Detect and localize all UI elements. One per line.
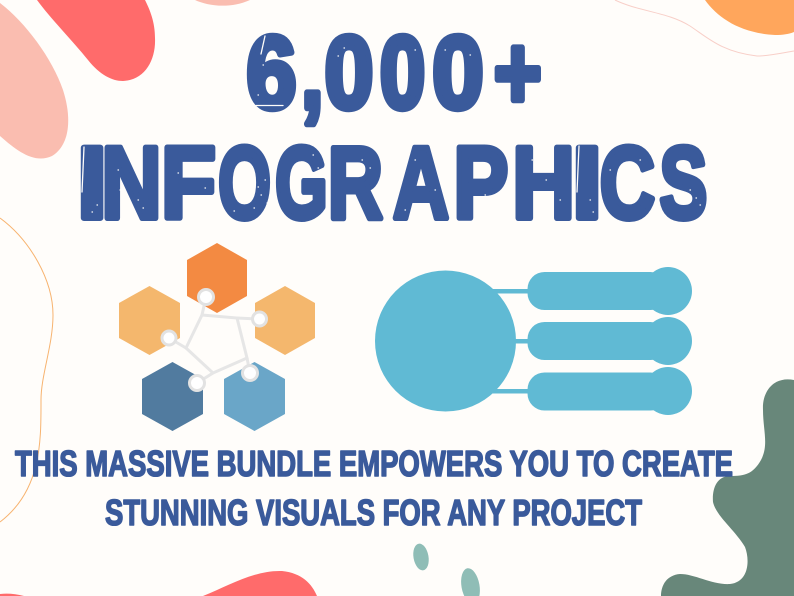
title: INFOGRAPHICS: P <box>454 126 508 240</box>
title: INFOGRAPHICS: N <box>101 126 162 240</box>
title: 6,000+: , <box>301 15 324 130</box>
chart: hexagon cycle <box>119 243 315 431</box>
curve: pink line top right <box>615 0 794 56</box>
subtitle line two: STUNNING VISUALS FOR ANY PROJECT <box>105 492 642 533</box>
hexagon: orange top <box>187 243 247 313</box>
bar three <box>528 367 692 415</box>
blob: small pink top <box>195 0 250 6</box>
title: 6,000+: 0 <box>432 15 484 130</box>
title: INFOGRAPHICS: H <box>512 126 575 240</box>
main circle <box>375 270 516 412</box>
chart: circle with three bars <box>375 267 692 415</box>
blob: green bottom right <box>661 379 794 596</box>
title: INFOGRAPHICS: I <box>77 126 108 240</box>
bar two <box>528 317 692 365</box>
distress texture on title <box>82 36 700 212</box>
title: 6,000+: 0 <box>380 15 425 130</box>
pentagon connector lines <box>169 297 259 383</box>
blob: red bottom <box>203 571 317 596</box>
title: INFOGRAPHICS: R <box>328 126 383 240</box>
hexagon: yellow left <box>119 286 180 355</box>
title: INFOGRAPHICS: I <box>572 126 602 240</box>
node circles <box>162 290 266 390</box>
title: 6,000+: 6 <box>246 15 297 130</box>
bar one <box>528 267 692 315</box>
title: 6,000+: + <box>494 15 542 130</box>
curve: orange line left <box>0 218 53 522</box>
blob: orange top right <box>705 0 794 35</box>
title: 6,000+: 0 <box>324 15 374 130</box>
hexagon: dark blue <box>142 362 203 431</box>
hexagon: light blue <box>224 362 285 431</box>
connector lines <box>490 289 532 294</box>
blob: pink left <box>0 3 68 159</box>
drop: teal two <box>459 567 482 596</box>
title: INFOGRAPHICS: G <box>275 126 328 240</box>
blob: red bottom left sliver <box>0 594 24 596</box>
hexagon: yellow right <box>255 286 315 355</box>
drop: teal one <box>411 542 431 572</box>
title: INFOGRAPHICS: A <box>393 126 449 240</box>
title: INFOGRAPHICS: C <box>600 126 655 240</box>
title: INFOGRAPHICS: O <box>218 126 271 240</box>
blob: red top left <box>37 0 155 81</box>
title: INFOGRAPHICS: S <box>660 126 707 240</box>
title: INFOGRAPHICS: F <box>161 126 216 240</box>
